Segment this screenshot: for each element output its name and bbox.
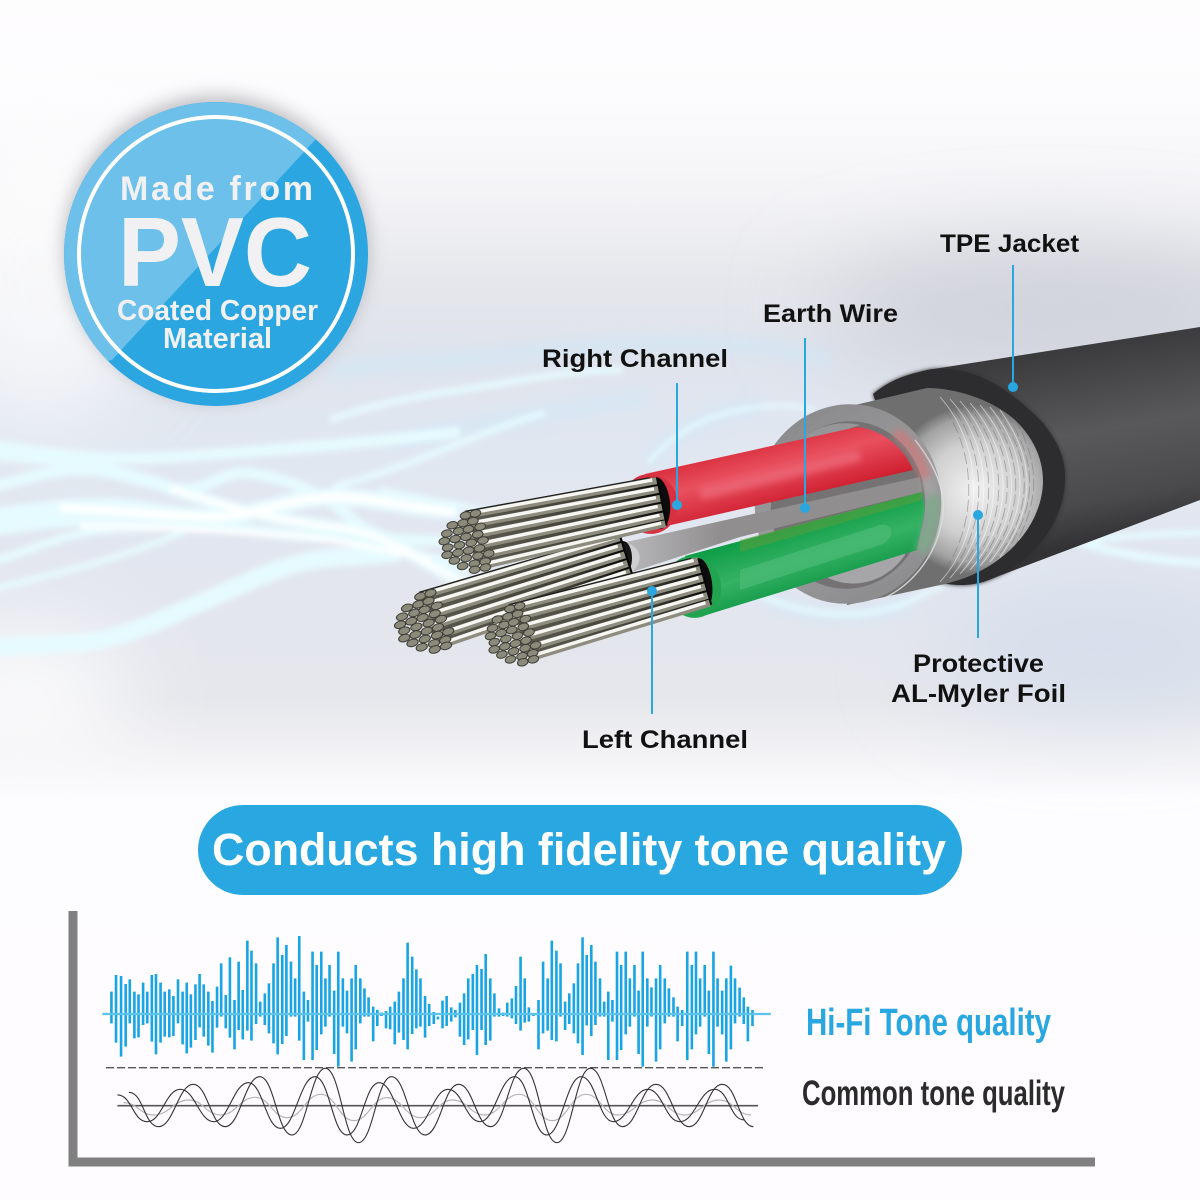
callout: Left Channel	[582, 586, 748, 754]
callout: Earth Wire: Earth Wire	[763, 300, 898, 328]
heading pill: Conducts high fidelity tone quality	[198, 805, 962, 895]
ring tint where wires meet the jacket	[700, 432, 932, 552]
callout: Left Channel: Left Channel	[582, 726, 748, 754]
callout: Earth Wire	[763, 300, 898, 513]
callout: Right Channel: Right Channel	[542, 345, 728, 373]
cable: black TPE jacket	[873, 327, 1200, 585]
callout: Protective AL-Myler Foil: AL-Myler Foil	[891, 680, 1066, 708]
chart: Hi-Fi waveform	[102, 936, 771, 1067]
cable: grey outer ring	[739, 389, 957, 619]
chart: dashed divider	[106, 1067, 764, 1069]
bundle: earth strands	[387, 529, 638, 662]
badge text: Made from: Made from	[120, 170, 313, 208]
chart frame axes	[73, 911, 1095, 1162]
wire: left channel (green)	[658, 492, 925, 624]
callout: Right Channel	[542, 345, 728, 510]
wire: earth (grey)	[580, 477, 922, 586]
cable: aluminium foil	[847, 388, 1043, 605]
callout: TPE Jacket: TPE Jacket	[940, 230, 1080, 258]
badge text: PVC: PVC	[118, 197, 312, 307]
background: energy light waves	[0, 343, 1200, 647]
legend: Common tone quality: Common tone quality	[802, 1074, 1065, 1113]
wire: right channel (red)	[617, 427, 913, 539]
bundle: right channel strands	[434, 472, 669, 579]
heading pill: Conducts high fidelity tone quality: Conducts high fidelity tone quality	[212, 824, 946, 875]
cable cross-section illustration	[387, 327, 1200, 674]
callout: Protective AL-Myler Foil: Protective	[913, 650, 1044, 678]
badge: Made from PVC	[60, 96, 368, 406]
callout: Protective AL-Myler Foil	[891, 510, 1066, 708]
badge text: Coated Copper: Coated Copper	[117, 295, 318, 327]
legend: Hi-Fi Tone quality: Hi-Fi Tone quality	[806, 1002, 1051, 1044]
callout: TPE Jacket	[940, 230, 1080, 392]
chart: common tone sine waves	[117, 1068, 758, 1143]
bundle: left channel strands	[479, 552, 714, 674]
badge text: Material: Material	[163, 323, 272, 355]
